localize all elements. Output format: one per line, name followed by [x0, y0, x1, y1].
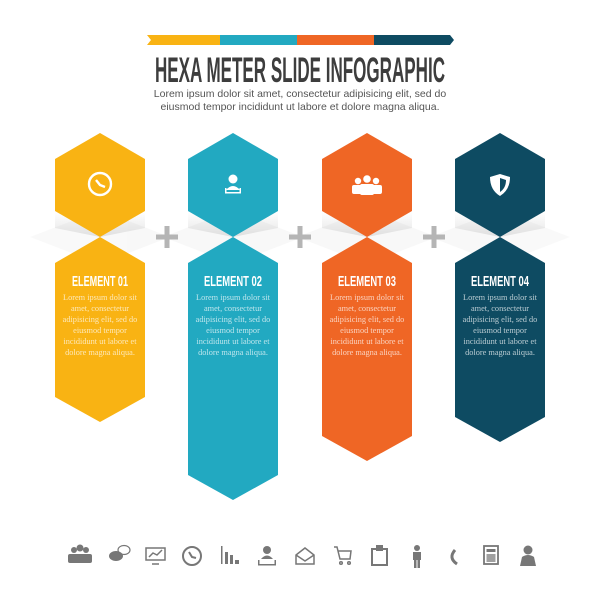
column 3: incididunt ut labore et	[330, 337, 404, 346]
subtitle: Lorem ipsum dolor sit amet, consectetur adipisicing elit, sed do	[154, 88, 446, 100]
column 4: amet, consectetur	[471, 304, 529, 313]
column 4: eiusmod tempor	[473, 326, 527, 335]
column 2: Lorem ipsum dolor sit	[196, 293, 271, 302]
icon: user at laptop	[225, 174, 241, 194]
icon: team	[68, 544, 92, 563]
icon: user laptop	[258, 546, 276, 566]
column 4: Lorem ipsum dolor sit	[463, 293, 538, 302]
bottom icon row	[68, 544, 536, 568]
column 2: amet, consectetur	[204, 304, 262, 313]
plus 1	[156, 226, 178, 248]
column 1: eiusmod tempor	[73, 326, 127, 335]
column 1: incididunt ut labore et	[63, 337, 137, 346]
column 3: ELEMENT 03	[338, 273, 396, 290]
plus 3	[423, 226, 445, 248]
icon: clock	[183, 547, 201, 565]
icon: chat	[109, 546, 130, 561]
column 3: eiusmod tempor	[340, 326, 394, 335]
column 2	[188, 133, 278, 500]
column 2: eiusmod tempor	[206, 326, 260, 335]
column 4: dolore magna aliqua.	[465, 348, 535, 357]
icon: clipboard	[372, 546, 387, 565]
icon: cart	[334, 547, 351, 564]
column 1: ELEMENT 01	[72, 273, 128, 290]
icon: bar chart	[221, 546, 239, 564]
icon: envelope	[296, 548, 314, 564]
column 2: dolore magna aliqua.	[198, 348, 268, 357]
column 4: adipisicing elit, sed do	[463, 315, 537, 324]
icon: clock	[89, 173, 111, 195]
column 3: adipisicing elit, sed do	[330, 315, 404, 324]
icon: person	[413, 545, 421, 568]
top color bar	[147, 35, 454, 45]
column 3: Lorem ipsum dolor sit	[330, 293, 405, 302]
icon: businessman	[520, 546, 536, 566]
column 1	[55, 133, 145, 422]
plus 2	[289, 226, 311, 248]
column 1: amet, consectetur	[71, 304, 129, 313]
column 4: incididunt ut labore et	[463, 337, 537, 346]
column 2: ELEMENT 02	[204, 273, 262, 290]
column 1: adipisicing elit, sed do	[63, 315, 137, 324]
column 3	[322, 133, 412, 461]
column 3: amet, consectetur	[338, 304, 396, 313]
column 1: Lorem ipsum dolor sit	[63, 293, 138, 302]
column 4	[455, 133, 545, 442]
subtitle	[154, 88, 446, 113]
icon: calculator	[484, 546, 498, 564]
shadow band	[30, 210, 570, 264]
icon: monitor	[146, 548, 165, 564]
subtitle: eiusmod tempor incididunt ut labore et dolore magna aliqua.	[160, 101, 440, 113]
column 4: ELEMENT 04	[471, 273, 529, 290]
icon: team	[352, 175, 382, 195]
column 2: adipisicing elit, sed do	[196, 315, 270, 324]
icon: phone	[452, 550, 457, 564]
column 3: dolore magna aliqua.	[332, 348, 402, 357]
column 1: dolore magna aliqua.	[65, 348, 135, 357]
column 2: incididunt ut labore et	[196, 337, 270, 346]
icon: shield	[490, 174, 510, 196]
